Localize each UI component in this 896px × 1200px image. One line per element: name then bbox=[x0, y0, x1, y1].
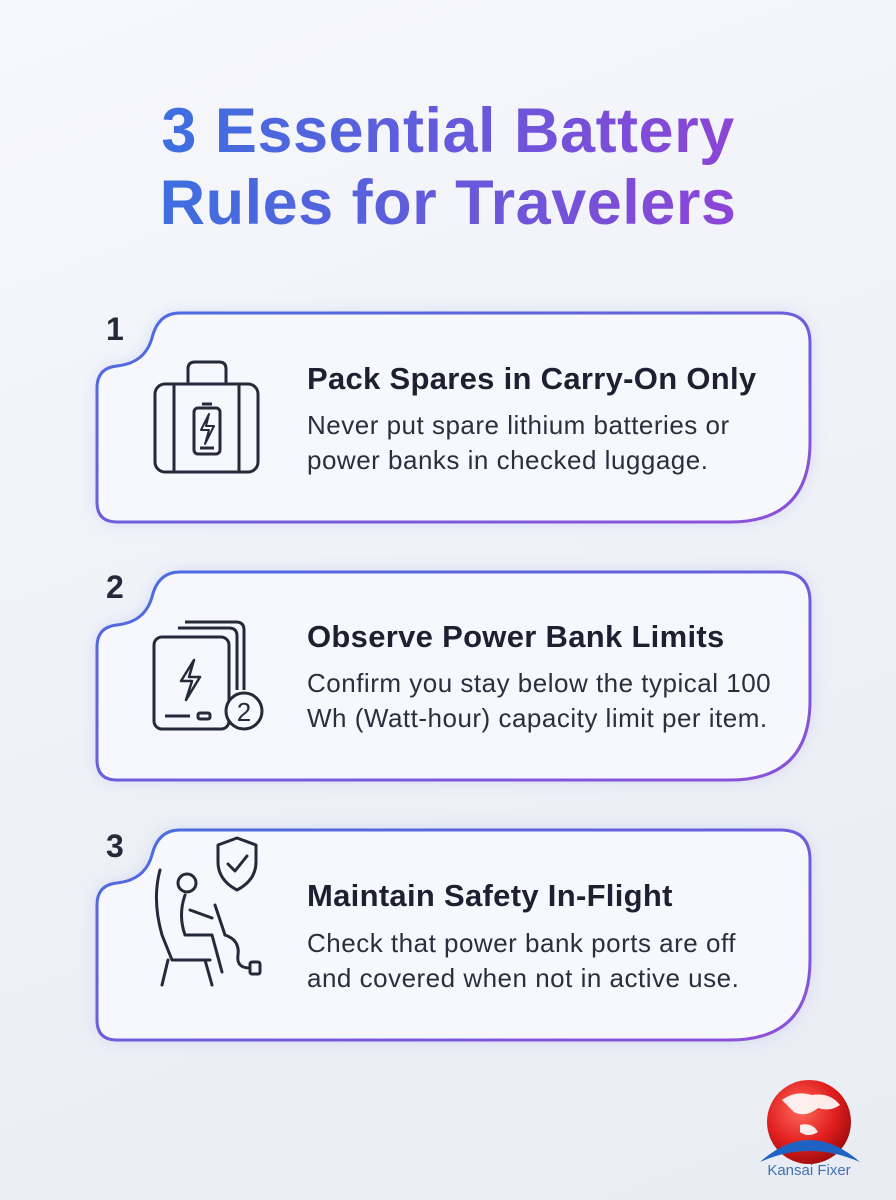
body 1: Never put spare lithium batteries or bbox=[307, 410, 730, 440]
body 1 bbox=[307, 410, 730, 475]
body 3 bbox=[307, 928, 739, 993]
number 1: 1 bbox=[106, 311, 124, 347]
body 2: Confirm you stay below the typical 100 bbox=[307, 668, 771, 698]
icon: power banks bbox=[154, 622, 262, 729]
number 3: 3 bbox=[106, 828, 124, 864]
heading 1: Pack Spares in Carry-On Only bbox=[307, 361, 757, 396]
icon: seated passenger with shield bbox=[156, 838, 260, 985]
heading 3: Maintain Safety In-Flight bbox=[307, 878, 673, 913]
body 3: Check that power bank ports are off bbox=[307, 928, 736, 958]
body 2: Wh (Watt-hour) capacity limit per item. bbox=[307, 703, 768, 733]
body 3: and covered when not in active use. bbox=[307, 963, 739, 993]
panel: rule 1 bbox=[97, 311, 810, 522]
title: Rules for Travelers bbox=[160, 168, 736, 238]
heading 2: Observe Power Bank Limits bbox=[307, 619, 725, 654]
panel: rule 2 bbox=[97, 569, 810, 780]
body 2 bbox=[307, 668, 771, 733]
logo: Kansai Fixer bbox=[760, 1080, 860, 1179]
panel: rule 2: 2 bbox=[237, 697, 251, 727]
number 2: 2 bbox=[106, 569, 124, 605]
panel: rule 3 bbox=[97, 828, 810, 1040]
logo: Kansai Fixer: Kansai Fixer bbox=[767, 1162, 851, 1179]
icon: suitcase with battery bbox=[155, 362, 258, 472]
title bbox=[160, 96, 736, 238]
body 1: power banks in checked luggage. bbox=[307, 445, 708, 475]
title: 3 Essential Battery bbox=[161, 96, 735, 166]
